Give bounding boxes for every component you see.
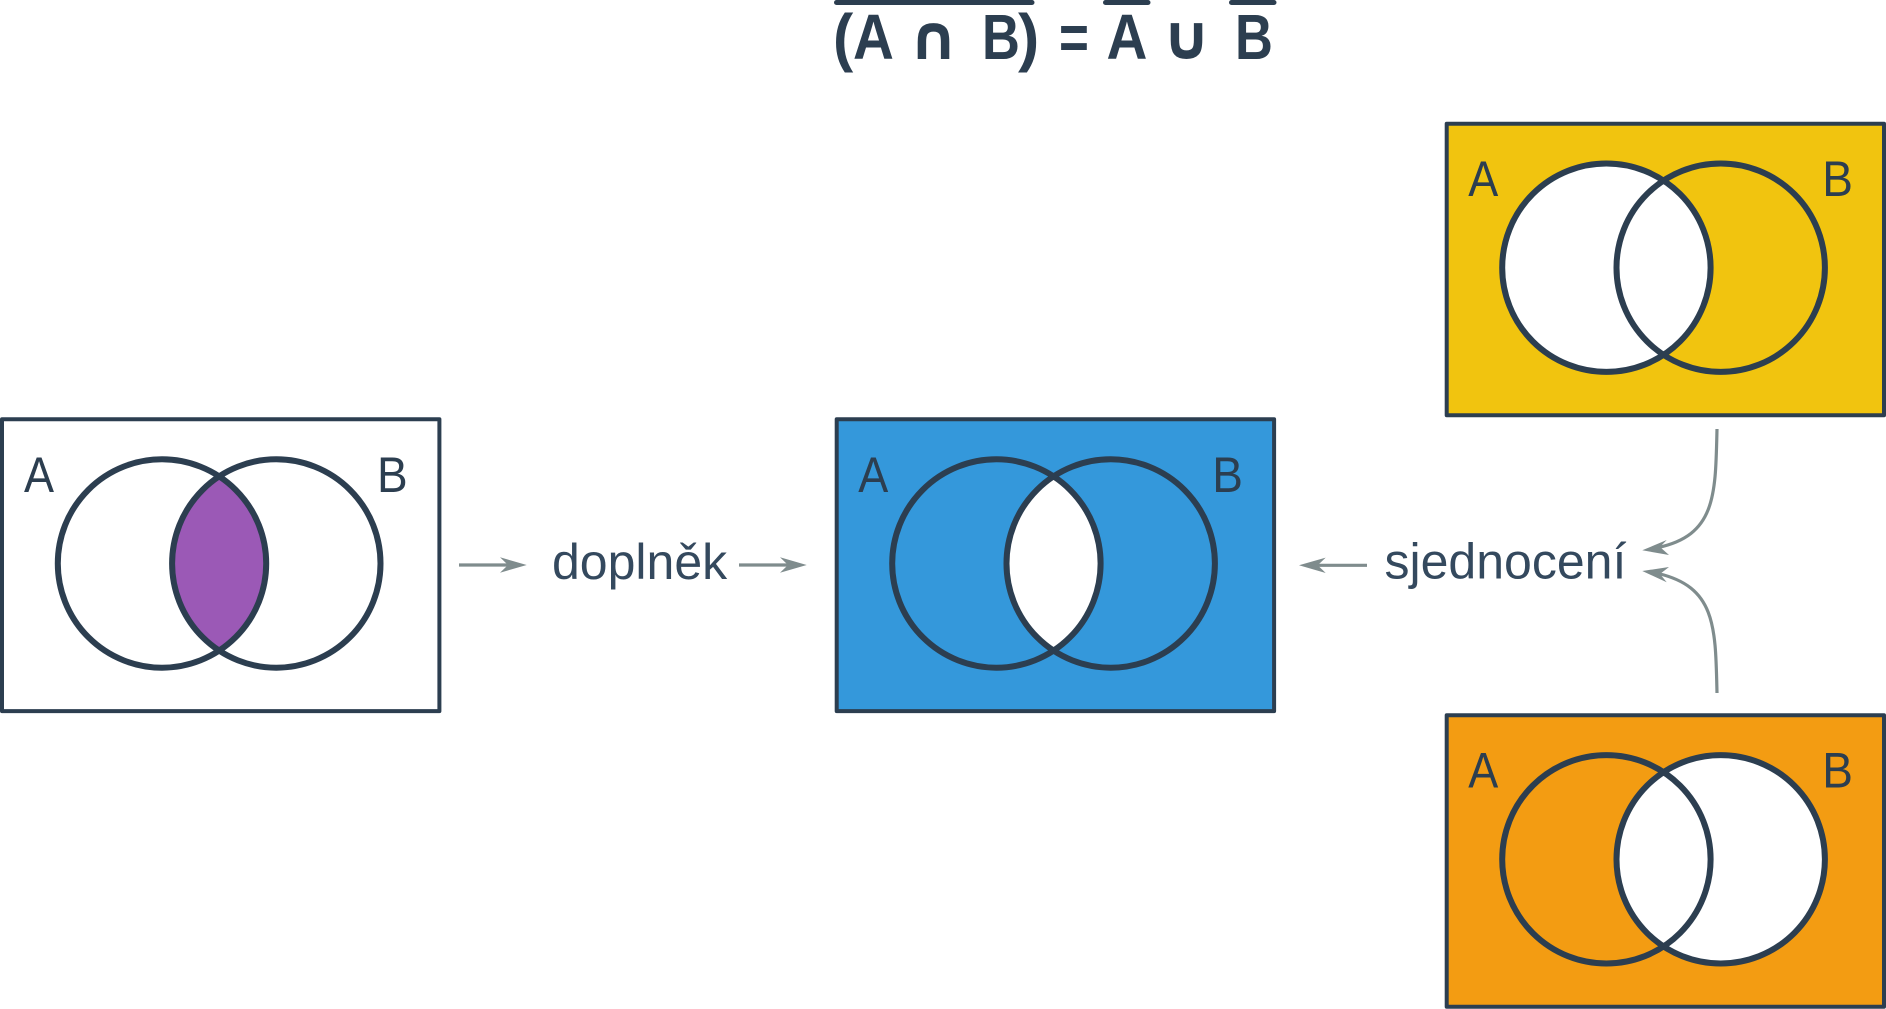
label B: B bbox=[377, 448, 408, 503]
title: De Morgan formula: ∩ bbox=[908, 1, 959, 74]
panel: complement of intersection (blue) bbox=[837, 419, 1274, 711]
circle B bbox=[172, 459, 380, 668]
title: De Morgan formula: ( bbox=[833, 2, 853, 73]
label B: B bbox=[1822, 152, 1853, 208]
panel: complement of A (yellow) bbox=[1447, 124, 1884, 415]
title: De Morgan formula: = bbox=[1059, 3, 1089, 73]
circle B, white bbox=[1616, 755, 1825, 964]
title: De Morgan formula bbox=[833, 1, 1274, 74]
circle B bbox=[1616, 164, 1825, 372]
panel: A intersect B (purple) bbox=[2, 419, 439, 711]
arrow: yellow panel to union bbox=[1642, 429, 1717, 555]
title: De Morgan formula: B bbox=[1235, 2, 1273, 73]
arrow: to complement label bbox=[459, 557, 527, 573]
label B: B bbox=[1212, 448, 1243, 503]
white intersection bbox=[1007, 476, 1101, 651]
title: De Morgan formula: B bbox=[982, 2, 1020, 73]
panel: complement of B (orange) bbox=[1447, 715, 1884, 1007]
arrow: to blue panel bbox=[739, 557, 807, 573]
label B: B bbox=[1822, 744, 1853, 799]
circle A bbox=[58, 459, 266, 668]
label A: A bbox=[24, 448, 54, 504]
circle A bbox=[892, 459, 1101, 668]
label A: A bbox=[858, 448, 889, 504]
arrow: orange panel to union bbox=[1642, 567, 1717, 693]
arrow: union to blue panel bbox=[1299, 558, 1367, 573]
label: sjednocení: sjednocení bbox=[1384, 534, 1626, 590]
label A: A bbox=[1468, 152, 1499, 208]
intersection fill bbox=[172, 476, 266, 651]
circle A, white bbox=[1502, 164, 1711, 372]
title: De Morgan formula: ) bbox=[1018, 1, 1039, 73]
circle B bbox=[1006, 459, 1215, 668]
title: De Morgan formula: A bbox=[1106, 1, 1147, 73]
title: De Morgan formula: ∪ bbox=[1161, 1, 1212, 74]
label A: A bbox=[1468, 744, 1499, 799]
circle A bbox=[1502, 755, 1711, 964]
title: De Morgan formula: A bbox=[853, 1, 894, 73]
label: doplněk: doplněk bbox=[552, 534, 728, 590]
